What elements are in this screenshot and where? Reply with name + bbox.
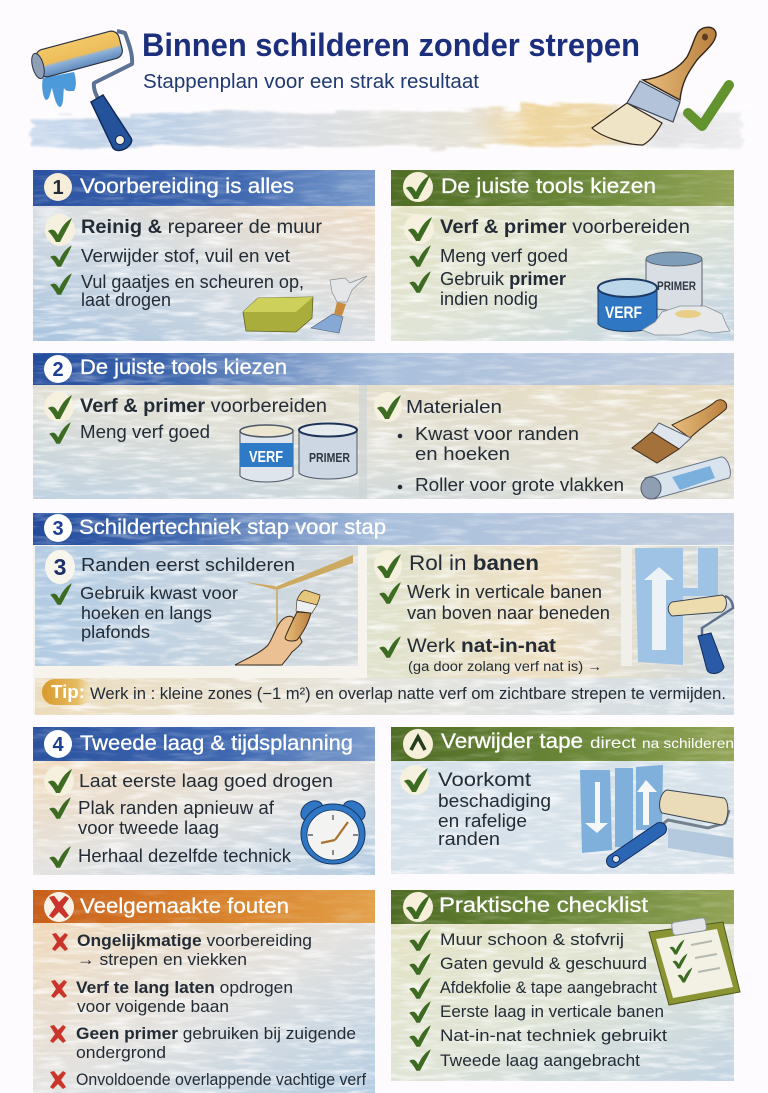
icon: verf can: [598, 279, 657, 332]
item: kwast: en hoeken: [415, 444, 510, 464]
panel: stap 3: [33, 513, 734, 715]
icon: verf can: [240, 425, 293, 482]
panel: voorbereiding: [33, 170, 375, 341]
header: voorbereiding: Voorbereiding is alles: [80, 175, 294, 198]
item: ongelijkmatige: [52, 931, 312, 969]
item: kwast: [398, 424, 579, 464]
icon: spatula: [311, 276, 367, 333]
item: muur: Muur schoon & stofvrij: [440, 930, 624, 949]
subpanel: rol in banen: Rol in banen: [409, 552, 539, 575]
item: geen primer: ondergrond: [76, 1043, 166, 1062]
header: fouten: [33, 890, 375, 923]
item: kwast: Kwast voor randen: [415, 424, 579, 444]
icon: rolled sheet: [641, 457, 730, 499]
subpanel: rol in banen: van boven naar beneden: [407, 603, 610, 623]
item: vul gaatjes: [50, 272, 304, 310]
item: meng verf: Meng verf goed: [80, 422, 210, 442]
item: gebruik primer: indien nodig: [440, 289, 538, 309]
subpanel: randen: Gebruik kwast voor: [80, 583, 238, 603]
item: afdekfolie: Afdekfolie & tape aangebracht: [440, 978, 657, 997]
panel: stap 4: [33, 727, 375, 875]
subpanel: randen: 3: [54, 554, 66, 580]
header: stap 3: [33, 513, 734, 545]
header: stap 3: 3: [52, 518, 64, 540]
icon: primer can: [646, 252, 702, 310]
icon: primer can: PRIMER: [309, 451, 350, 465]
subpanel: randen: hoeken en langs: [81, 603, 212, 623]
item: plak randen: Plak randen apnieuw af: [78, 798, 275, 818]
header: stap 2: 2: [52, 359, 64, 381]
item: voorkomt: beschadiging: [438, 791, 551, 811]
icon: arrows: [585, 780, 657, 833]
item: laat drogen: [44, 766, 333, 796]
item: gebruik primer: [409, 269, 566, 309]
item: meng verf: Meng verf goed: [440, 246, 568, 266]
icon: paint stain: [675, 310, 701, 318]
icon: wall corner: [668, 828, 733, 858]
panel: stap 2: [33, 353, 734, 499]
header: stap 4: [33, 727, 375, 761]
header: tape: Verwijder tape: [441, 730, 583, 753]
icon: brush: [632, 400, 727, 463]
item: geen primer: Geen primer gebruiken bij zuigende: [76, 1024, 356, 1043]
header: stap 3: Schildertechniek stap voor stap: [79, 516, 386, 539]
panel: tape: [391, 727, 734, 874]
item: plak randen: voor tweede laag: [78, 818, 219, 838]
tip pill: [42, 679, 92, 705]
item: muur: [409, 929, 624, 951]
item: geen primer: [50, 1024, 356, 1062]
header: tools kiezen: De juiste tools kiezen: [441, 175, 656, 198]
icon: cloth: [642, 306, 730, 335]
icon: clipboard: [649, 917, 740, 1005]
icon: sponge: [243, 297, 313, 332]
icon: alarm clock: [297, 797, 369, 864]
item: plak randen: [49, 797, 275, 838]
header: stap 4: 4: [52, 734, 64, 756]
icon: paint roller: [29, 29, 132, 151]
item: verf te lang: Verf te lang laten opdrogen: [76, 978, 293, 997]
item: onvoldoende: Onvoldoende overlappende vachtige verf: [76, 1070, 366, 1089]
header: checklist: Praktische checklist: [439, 894, 648, 917]
item: gaten: Gaten gevuld & geschuurd: [440, 954, 647, 973]
item: verf primer: [44, 392, 327, 422]
header: stap 2: De juiste tools kiezen: [80, 356, 287, 379]
header: tools kiezen: [391, 170, 734, 206]
icon: hand with brush: [235, 555, 353, 665]
item: roller: Roller voor grote vlakken: [415, 475, 624, 495]
subpanel: randen: [35, 546, 358, 666]
header: tape: na schilderen: [642, 735, 734, 751]
item: voorkomt: randen: [438, 829, 500, 849]
item: herhaal: Herhaal dezelfde technick: [78, 846, 292, 866]
subpanel: rol in banen: [367, 546, 734, 678]
item: verf primer: [404, 214, 690, 244]
subpanel: randen: plafonds: [81, 622, 150, 642]
item: ongelijkmatige: Ongelijkmatige voorbereiding: [77, 931, 312, 950]
icon: verf can: VERF: [605, 303, 642, 322]
item: nat-in-nat: Nat-in-nat techniek gebruikt: [440, 1026, 667, 1045]
item: voorkomt: Voorkomt: [438, 770, 532, 791]
panel: checklist: [391, 890, 740, 1081]
item: reinig: [45, 214, 323, 246]
subtitle: Stappenplan voor een strak resultaat: [143, 71, 479, 93]
header: voorbereiding: [33, 170, 375, 206]
tip text: Werk in : kleine zones (−1 m²) en overlap natte verf om zichtbare strepen te vermijden.: [90, 685, 726, 703]
item: verf te lang: voor voigende baan: [77, 997, 229, 1016]
header: fouten: Veelgemaakte fouten: [80, 895, 289, 918]
item: voorkomt: en rafelige: [438, 811, 527, 831]
item: ongelijkmatige: → strepen en viekken: [77, 950, 247, 969]
item: verf primer: Verf & primer voorbereiden: [80, 396, 327, 417]
item: verf primer: Verf & primer voorbereiden: [440, 217, 690, 238]
item: tweede laag: Tweede laag aangebracht: [440, 1051, 640, 1070]
icon: roller: [668, 595, 733, 674]
panel: fouten: [33, 890, 375, 1093]
item: verwijder: Verwijder stof, vuil en vet: [81, 246, 290, 266]
tip bar: [35, 678, 734, 715]
header: tape: [391, 727, 734, 761]
icon: arrow up: [644, 567, 674, 650]
item: gebruik primer: Gebruik primer: [440, 269, 566, 289]
header: voorbereiding: 1: [52, 177, 64, 199]
item: reinig: Reinig & repareer de muur: [81, 217, 323, 238]
icon: large green check: [688, 85, 729, 126]
icon: roller: [612, 790, 729, 862]
subpanel: rol in banen: Werk nat-in-nat: [407, 636, 557, 657]
header: tape: direct: [590, 735, 637, 752]
header: checklist: [391, 890, 734, 924]
icon: primer can: PRIMER: [657, 279, 696, 293]
item: laat drogen: Laat eerste laag goed drogen: [79, 770, 333, 791]
item: verf te lang: [51, 978, 293, 1016]
subpanel: randen: Randen eerst schilderen: [81, 555, 295, 575]
panel: tools kiezen: [391, 170, 734, 341]
icon: paint brush: [592, 27, 716, 145]
item: vul gaatjes: laat drogen: [81, 290, 171, 310]
icon: verf can: VERF: [249, 449, 283, 466]
header: stap 2: [33, 353, 734, 385]
item: voorkomt: [400, 765, 551, 849]
subpanel: rol in banen: (ga door zolang verf nat is) →: [408, 659, 602, 674]
item: materialen: Materialen: [406, 397, 502, 417]
item: eerste laag: Eerste laag in verticale banen: [440, 1002, 664, 1021]
subpanel: rol in banen: Werk in verticale banen: [407, 582, 602, 602]
icon: painted stripes: [580, 765, 663, 853]
paint band: [20, 90, 754, 155]
item: vul gaatjes: Vul gaatjes en scheuren op,: [81, 272, 304, 292]
icon: primer can: [299, 424, 357, 479]
tip label: Tip:: [51, 682, 85, 702]
item: materialen: [374, 392, 502, 422]
header: stap 4: Tweede laag & tijdsplanning: [80, 732, 353, 755]
title: Binnen schilderen zonder strepen: [142, 27, 640, 63]
